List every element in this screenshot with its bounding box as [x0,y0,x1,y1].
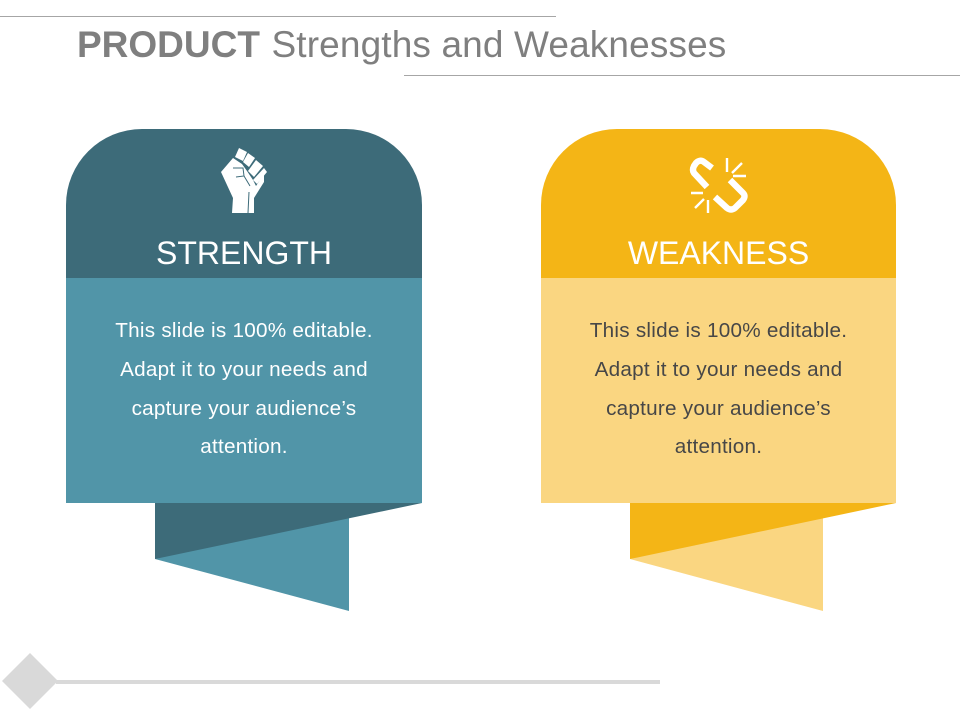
text: weakness body: This slide is 100% editable. [590,319,847,342]
heading: strength: STRENGTH [156,235,332,271]
ribbon tail: strength [155,503,422,611]
body: strength [66,278,422,503]
title: Strengths and Weaknesses [272,24,726,65]
text: weakness body: Adapt it to your needs and [595,358,842,381]
header: weakness [541,129,896,278]
header: strength [66,129,422,278]
panel: strength [66,129,422,611]
text: strength body: Adapt it to your needs and [120,358,368,381]
icon: raised fist [221,148,267,213]
icon: broken chain link [691,158,746,213]
title: PRODUCT [77,24,260,65]
text: strength body: capture your audience’s [132,397,356,420]
text: weakness body [590,319,847,458]
text: strength body: This slide is 100% editable. [115,319,373,342]
ribbon tail: weakness [630,503,896,611]
text: weakness body: attention. [675,435,762,458]
body: weakness [541,278,896,503]
text: weakness body: capture your audience’s [606,397,831,420]
heading: weakness: WEAKNESS [628,235,809,271]
text: strength body [115,319,373,458]
footer diamond and line [2,653,660,709]
text: strength body: attention. [200,435,288,458]
panel: weakness [541,129,896,611]
